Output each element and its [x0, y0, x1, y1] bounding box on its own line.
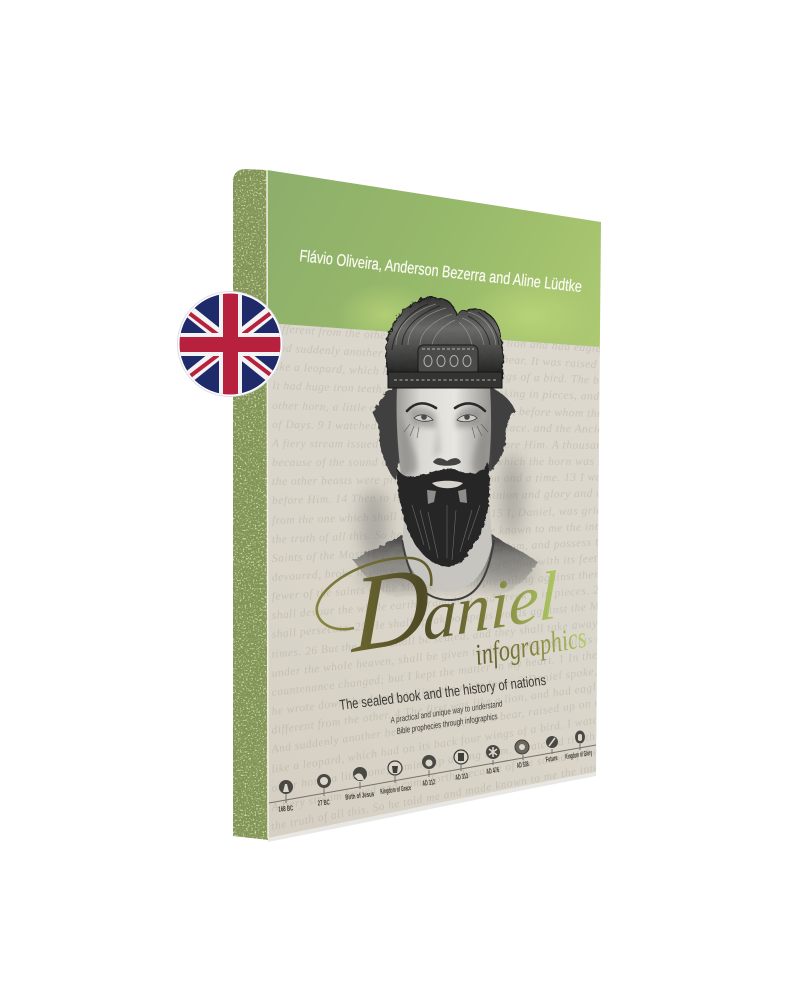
- beard: [397, 462, 490, 567]
- handwritten background text: different from the other. 4 The first was like a lion and had eagle's wings. I watched till the wings: [272, 323, 768, 365]
- cover left hinge highlight: [267, 170, 268, 838]
- event: Future: Future: [545, 753, 558, 764]
- portrait of Daniel: [353, 298, 538, 600]
- side hair: [373, 385, 515, 480]
- handwritten background text: It had huge iron teeth; it was devouring, breaking in pieces, and trampling the residue with its feet: [271, 380, 775, 409]
- handwritten background text: other horn, a little one, coming up among them, before whom three of the first horns were plucked out: [272, 400, 791, 425]
- handwritten background text: Saints of the Most High shall receive the kingdom, and possess the kingdom forever, even forever: [272, 528, 765, 565]
- event: AD 313: AD 313: [454, 771, 469, 782]
- event: 168 BC: 168 BC: [278, 803, 294, 814]
- sketch smudge shadows: [359, 453, 535, 588]
- handwritten background text: And suddenly another beast, a second, like a bear, raised up on one side, with three ribs in its mouth: [270, 671, 780, 756]
- handwritten background text: other horn, a little one, coming up among them. I watched till thrones were put in place there: [271, 707, 742, 795]
- event: AD 312: [422, 755, 436, 788]
- green top band: [260, 165, 605, 355]
- event: Birth of Jesus: Birth of Jesus: [345, 789, 375, 802]
- event: Kingdom of Grace: [380, 761, 412, 796]
- mouth and lip: [432, 481, 463, 488]
- handwritten background text: like a leopard, which had on its back four wings of a bird. The beast also had four heads and dominion: [272, 361, 797, 395]
- event: 27 BC: 27 BC: [317, 797, 331, 808]
- handwritten background text: under the whole heaven, shall be given to the people, the saints of the Most High. His kingdom: [271, 617, 752, 680]
- book bottom page edge: [268, 772, 596, 842]
- event: Birth of Jesus: [345, 767, 375, 802]
- timeline: [269, 730, 596, 814]
- cheek and eye shading: [400, 408, 488, 476]
- eyes: [414, 414, 477, 422]
- tagline: Bible prophecies through infographics: [396, 711, 499, 736]
- handwritten background text: fewer of the saints of the Most High, and prevailing against them, 22 until the Ancient of Days came: [271, 556, 782, 603]
- handwritten background text: countenance changed; but I kept the matter in my heart. 1 In the first year of Belshazzar king he: [271, 631, 760, 699]
- eyebrows: [407, 403, 485, 411]
- icon: UK flag badge: [175, 290, 285, 400]
- tagline: [389, 698, 503, 736]
- face: [397, 386, 491, 505]
- event: Kingdom of Glory: [565, 730, 593, 761]
- hair top: [386, 298, 503, 378]
- handwritten background text: the other beasts were prolonged for a season and a time. 13 I was watching in the night visions: [272, 469, 757, 488]
- event: AD 312: AD 312: [422, 777, 436, 788]
- event: 27 BC: [317, 774, 331, 808]
- neckline: [402, 540, 494, 600]
- cream lower panel: [267, 323, 601, 840]
- handwritten background text: he wrote down the dream, telling the main facts. 2 Daniel spoke, saying, I saw in my vision by night: [271, 643, 777, 718]
- event: AD 313: [454, 750, 469, 782]
- handwritten background text: the truth of all this. So he told me and made known to me the interpretation of these things: 17: [272, 515, 754, 546]
- handwritten background text: from the one which shall not be destroyed. 15 I, Daniel, was grieved in my spirit within my body: [272, 500, 762, 527]
- event: Future: [545, 736, 558, 764]
- neck: [402, 505, 492, 592]
- subtitle: The sealed book and the history of nations: [339, 673, 547, 714]
- tagline: A practical and unique way to understand: [389, 698, 503, 725]
- event: 168 BC: [278, 780, 294, 814]
- event: AD 476: AD 476: [485, 765, 500, 776]
- authors line: Flávio Oliveira, Anderson Bezerra and Aline Lüdtke: [299, 247, 583, 296]
- handwritten background text: [272, 324, 600, 830]
- title: Daniel: [317, 520, 558, 677]
- handwritten background text: before Him. 14 Then to Him was given dominion and glory and a kingdom, that all peoples, nations: [272, 484, 779, 507]
- hair strands: [396, 304, 496, 345]
- handwritten background text: because of the sound of the pompous words which the horn was speaking; I watched till the beast: [272, 455, 768, 469]
- timeline: Kingdom of Grace: [380, 783, 412, 796]
- event: AD 538: [515, 740, 529, 770]
- handwritten background text: shall persecute. 25 He shall speak pompous words against the Most High, shall persecute the saints: [271, 585, 779, 641]
- text: Kingdom of Glory: [565, 748, 593, 761]
- book: [180, 169, 601, 842]
- handwritten background text: A fiery stream issued and came forth from before Him. A thousand thousands ministered to Him: [271, 438, 758, 453]
- handwritten background text: times. 26 But the court shall be seated, and they shall take away his dominion, to consume and: [271, 603, 753, 661]
- handwritten background text: the truth of all this. So he told me and made known to me the interpretation of these things: [270, 739, 726, 833]
- headband: [388, 345, 502, 388]
- title word: Daniel: [350, 520, 558, 677]
- title flourish: [317, 558, 431, 629]
- handwritten background text: shall devour the whole earth, trample it and break it in pieces. 24 The ten horns are ten kings: [271, 573, 747, 622]
- event: AD 538: AD 538: [516, 759, 529, 770]
- shirt and shoulders: [353, 533, 538, 596]
- handwritten background text: A fiery stream issued and came forth, because of the sound of the pompous words which the horn spoke: [269, 713, 790, 814]
- title: infographics: infographics: [473, 621, 589, 672]
- wrinkles: [404, 424, 488, 438]
- handwritten background text: like a leopard, which had on its back four wings of a bird. I watched till the beast was slain, and: [271, 690, 759, 776]
- handwritten background text: devoured, broke in pieces, and trampled the residue with its feet; 20 and the ten horns on its head: [271, 542, 769, 584]
- handwritten background text: of Days. 9 I watched till thrones were put in place, and the Ancient of Days was seated; His garment: [272, 419, 785, 438]
- front cover: [268, 170, 601, 838]
- handwritten background text: And suddenly another beast, a second, like a bear. It was raised up on one side, and had three ribs: [271, 342, 774, 380]
- event: AD 476: [485, 745, 500, 776]
- beard highlights: [427, 489, 467, 504]
- nose: [433, 458, 461, 466]
- timeline axis: [269, 745, 596, 803]
- book spine: [233, 169, 269, 840]
- handwritten background text: different from the other. 4 The first was like a lion, and had eagle's wings, I watched till its wings: [271, 659, 765, 737]
